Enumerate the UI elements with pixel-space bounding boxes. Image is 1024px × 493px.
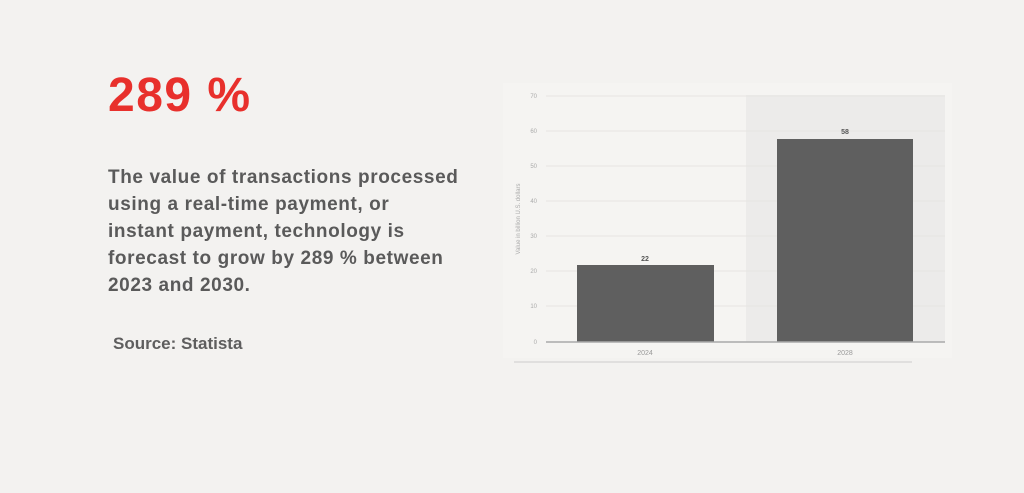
- bar chart: 2028: [837, 350, 853, 357]
- bar chart: 10: [530, 304, 538, 310]
- bar chart: 60: [530, 129, 538, 135]
- text block: description: forecast to grow by 289 % between: [108, 248, 444, 269]
- text block: description: [108, 167, 458, 296]
- bar chart: 40: [530, 199, 538, 205]
- bar chart: 20: [530, 269, 538, 275]
- bar chart: Value in billion U.S. dollars: [516, 184, 522, 254]
- bar 2028: [777, 139, 913, 342]
- text block: description: The value of transactions processed: [108, 167, 458, 188]
- bar chart: 70: [530, 94, 538, 100]
- bar chart: 58: [841, 129, 849, 136]
- text block: description: instant payment, technology is: [108, 221, 405, 242]
- bar chart: 2024: [637, 350, 653, 357]
- source: Source: Statista: [113, 334, 242, 353]
- bar 2024: [577, 265, 714, 342]
- title: 289 %: [108, 69, 252, 122]
- text block: description: using a real-time payment, or: [108, 194, 389, 215]
- bar chart: 50: [530, 164, 538, 170]
- bar chart: 30: [530, 234, 538, 240]
- bar chart: 0: [534, 340, 538, 346]
- text block: description: 2023 and 2030.: [108, 275, 251, 296]
- bar chart: 22: [641, 256, 649, 263]
